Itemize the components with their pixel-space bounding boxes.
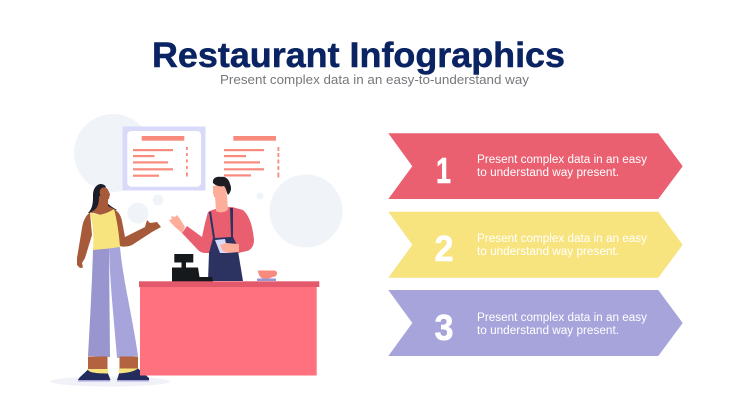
illustration: restaurant counter scene [50, 114, 342, 386]
right arm [114, 209, 161, 247]
step 3: Present complex data in an easy [477, 312, 647, 324]
ankles [88, 356, 108, 370]
trousers [88, 248, 110, 357]
step 2: Present complex data in an easy [477, 233, 647, 245]
left arm [77, 212, 92, 268]
step 3: 3 [434, 307, 454, 348]
step 1: to understand way present. [477, 167, 619, 179]
coffee cup [257, 270, 277, 281]
counter [139, 281, 319, 376]
menu board: plain [224, 136, 279, 178]
neck and chest [91, 196, 114, 216]
step 3 [388, 290, 683, 356]
head [213, 184, 227, 199]
step 2: to understand way present. [477, 246, 619, 258]
apron [208, 208, 243, 281]
shoes [78, 368, 149, 380]
hair [213, 177, 231, 195]
step 1 [388, 133, 683, 199]
subtitle: Present complex data in an easy-to-understand way [220, 73, 530, 87]
man [169, 177, 254, 281]
step 1: Present complex data in an easy [477, 154, 647, 166]
raised hand [169, 215, 185, 233]
step 3: to understand way present. [477, 325, 619, 337]
neck [215, 196, 228, 212]
notepad [215, 239, 228, 253]
step 2: 2 [434, 228, 454, 269]
title: Restaurant Infographics [152, 36, 565, 75]
background circles [74, 114, 342, 248]
cash register [172, 254, 213, 282]
hand holding notepad [220, 243, 239, 253]
step 1: 1 [436, 150, 451, 191]
tank top [90, 209, 120, 251]
step 2 [388, 212, 683, 278]
hair [88, 184, 117, 213]
socks [88, 369, 108, 374]
floor shadow [50, 376, 170, 386]
menu board: framed [122, 126, 206, 190]
sweater [182, 207, 254, 253]
face [100, 187, 110, 200]
woman [77, 184, 161, 382]
